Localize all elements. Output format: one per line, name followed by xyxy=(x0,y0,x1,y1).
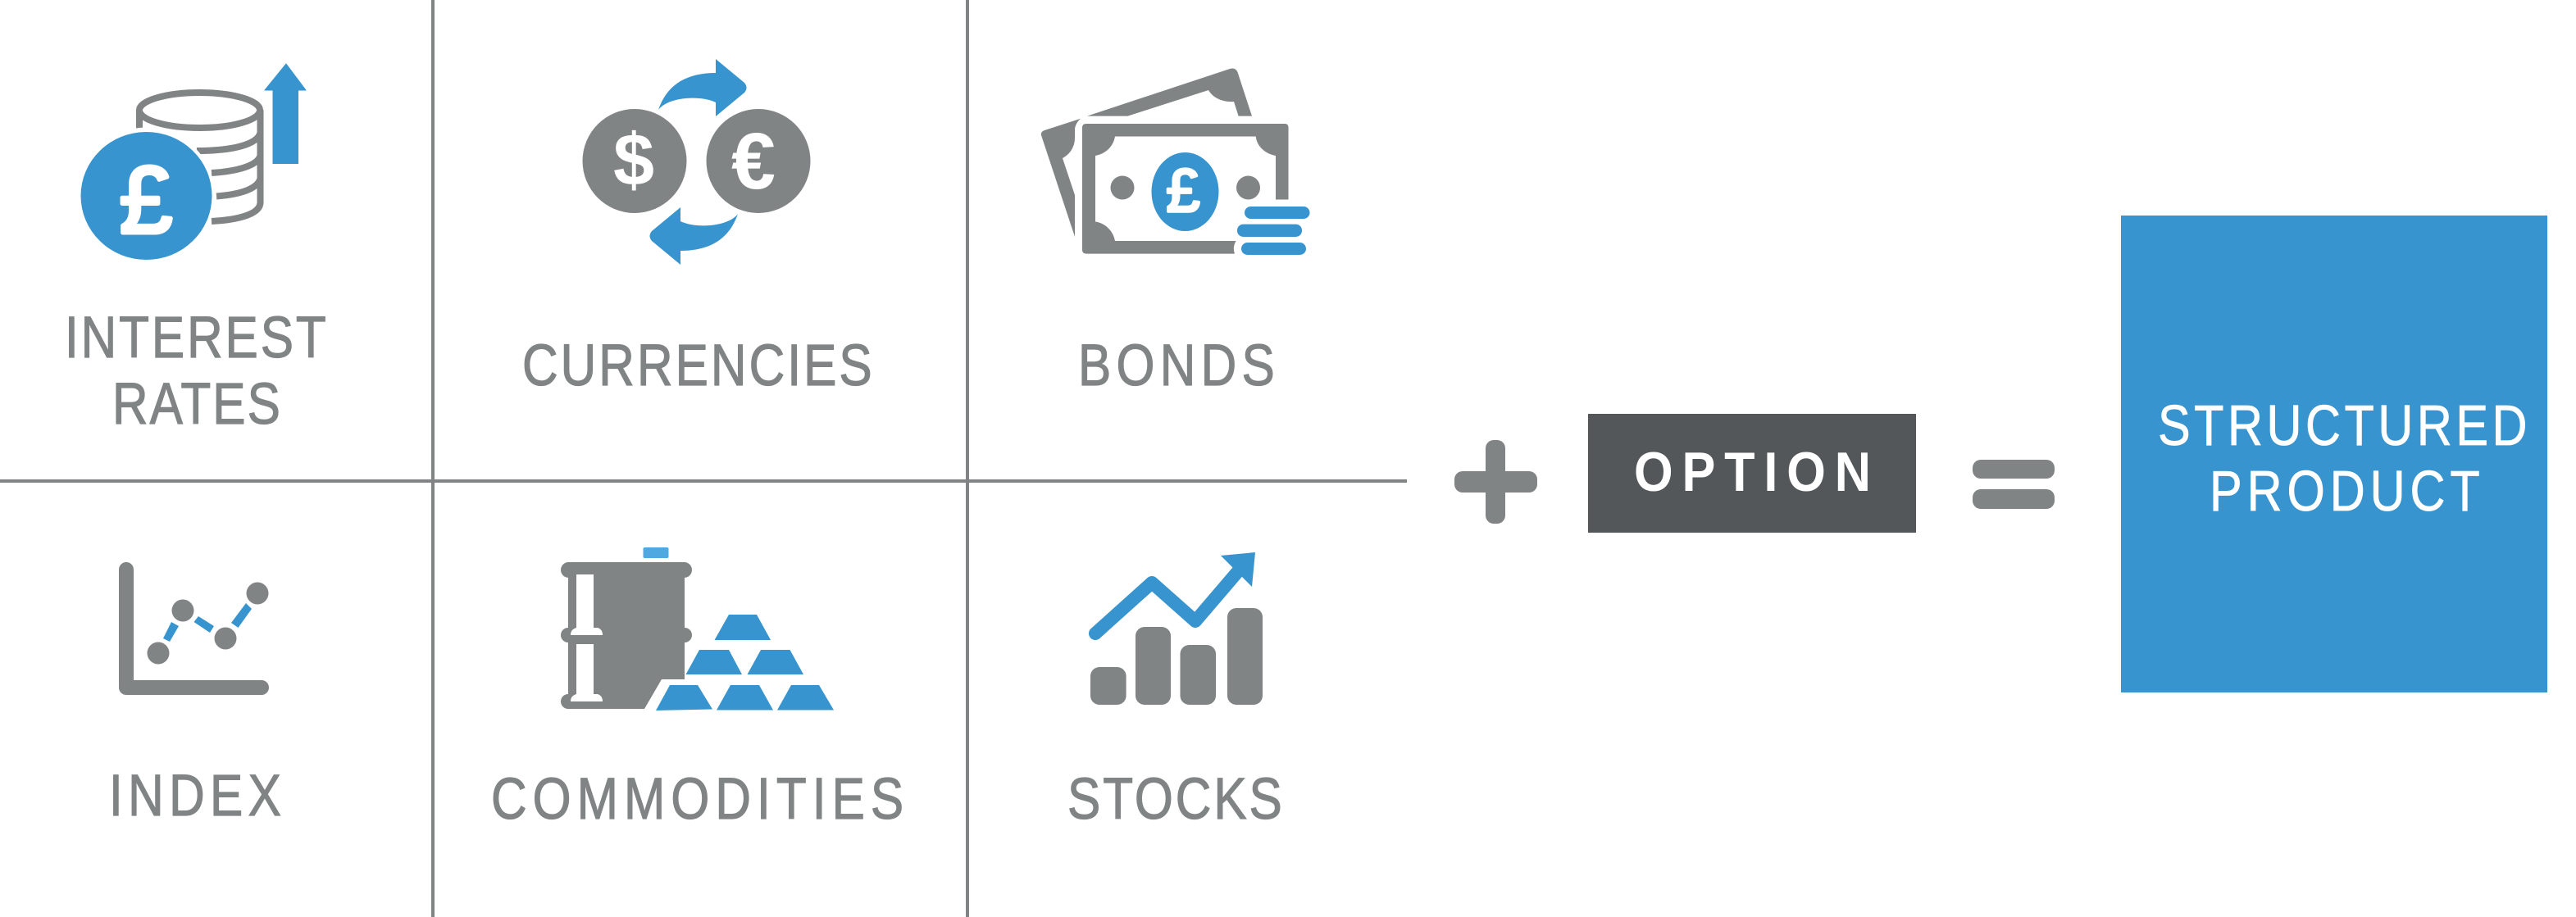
panel: currencies xyxy=(522,59,872,397)
panel: bonds xyxy=(1041,69,1310,397)
icon: dollar and euro exchange: $ xyxy=(613,120,654,202)
label: index: INDEX xyxy=(109,762,281,828)
icon: oil barrel and gold bars xyxy=(561,547,834,710)
icon: dollar and euro exchange xyxy=(582,59,810,265)
icon: bar chart with rising arrow xyxy=(1090,552,1263,705)
label: commodities: COMMODITIES xyxy=(491,765,903,831)
label: interest rates: RATES xyxy=(112,370,280,436)
label: structured product: STRUCTURED xyxy=(2158,393,2528,457)
label: currencies: CURRENCIES xyxy=(522,332,872,397)
panel: index xyxy=(109,570,281,828)
box: option xyxy=(1588,414,1916,533)
box: structured product xyxy=(2121,216,2547,692)
icon: banknotes with pound and coins xyxy=(1041,69,1310,255)
label: option: OPTION xyxy=(1634,440,1871,503)
label: structured product: PRODUCT xyxy=(2210,458,2480,523)
icon: index line chart xyxy=(126,570,269,688)
icon: equals sign xyxy=(1973,460,2055,509)
label: bonds: BONDS xyxy=(1078,332,1275,397)
icon: coin stack with pound coin and up arrow: £ xyxy=(120,147,172,253)
panel: commodities xyxy=(491,547,903,831)
label: interest rates: INTEREST xyxy=(65,304,326,370)
label: interest rates xyxy=(65,304,326,436)
panel: stocks xyxy=(1067,552,1282,831)
label: structured product xyxy=(2158,393,2527,523)
icon: banknotes with pound and coins: £ xyxy=(1166,157,1200,225)
panel: interest rates xyxy=(65,64,326,436)
label: stocks: STOCKS xyxy=(1067,765,1282,831)
icon: dollar and euro exchange: € xyxy=(731,116,776,206)
icon: plus sign xyxy=(1454,440,1537,524)
icon: coin stack with pound coin and up arrow xyxy=(78,64,306,264)
